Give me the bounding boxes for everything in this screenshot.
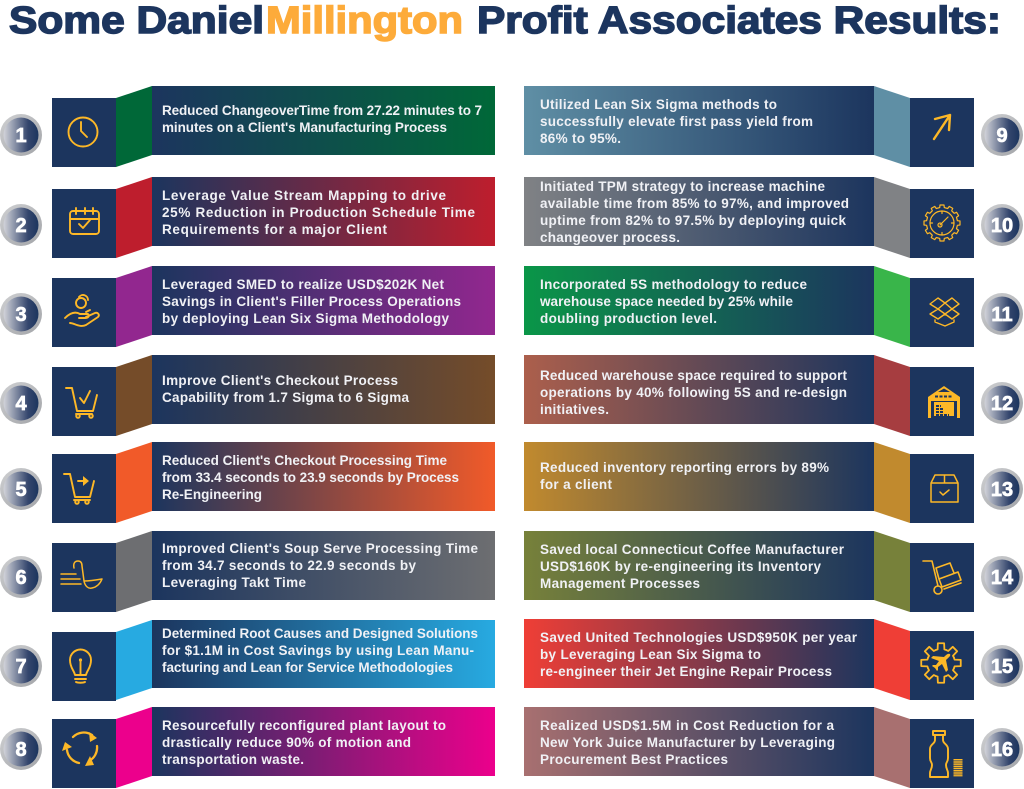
panel: result 13 bbox=[524, 442, 1023, 523]
text 1: Reduced ChangeoverTime from 27.22 minutes to 7 bbox=[162, 103, 482, 118]
text 11: doubling production level. bbox=[540, 311, 717, 326]
icon: calendar bbox=[70, 208, 99, 234]
text 2 bbox=[162, 188, 475, 237]
fold 9 bbox=[874, 86, 910, 167]
number badge 10: 10 bbox=[991, 215, 1013, 237]
icon: warehouse bbox=[928, 386, 960, 418]
icon box 13 bbox=[910, 454, 974, 523]
text 7: facturing and Lean for Service Methodologies bbox=[162, 660, 453, 675]
text 14 bbox=[540, 542, 845, 591]
number badge 6: 6 bbox=[15, 567, 27, 589]
number badge 5 bbox=[0, 468, 42, 510]
icon: gear gauge bbox=[924, 205, 960, 241]
icon: upward arrow bbox=[934, 115, 950, 139]
panel: result 4 bbox=[0, 355, 495, 436]
icon box 10 bbox=[910, 189, 974, 258]
icon box 5 bbox=[52, 454, 116, 523]
title: Some Daniel bbox=[9, 0, 264, 42]
text 11: warehouse space needed by 25% while bbox=[539, 294, 793, 309]
icon: clock bbox=[68, 118, 98, 146]
text 11: Incorporated 5S methodology to reduce bbox=[540, 277, 807, 292]
number badge 16 bbox=[981, 728, 1023, 770]
panel: result 9 bbox=[524, 86, 1023, 167]
text 13: Reduced inventory reporting errors by 89% bbox=[540, 460, 829, 475]
icon box 14 bbox=[910, 543, 974, 612]
icon: gear with airplane bbox=[921, 643, 961, 683]
number badge 6 bbox=[0, 556, 42, 598]
text panel 11 bbox=[524, 266, 874, 335]
icon box 8 bbox=[52, 719, 116, 788]
icon box 12 bbox=[910, 367, 974, 436]
icon: box with check bbox=[931, 475, 958, 502]
text 16: Procurement Best Practices bbox=[540, 752, 728, 767]
number badge 16: 16 bbox=[991, 739, 1013, 761]
text panel 8 bbox=[152, 707, 495, 776]
icon box 11 bbox=[910, 278, 974, 347]
fold 1 bbox=[116, 86, 152, 167]
text 10: changeover process. bbox=[540, 230, 680, 245]
fold 16 bbox=[874, 707, 910, 788]
panel: result 14 bbox=[524, 531, 1023, 612]
number badge 11: 11 bbox=[991, 304, 1013, 326]
fold 7 bbox=[116, 620, 152, 700]
panel: result 5 bbox=[0, 442, 495, 523]
number badge 1: 1 bbox=[15, 125, 27, 147]
panel: result 15 bbox=[524, 619, 1023, 700]
text 7: Determined Root Causes and Designed Solutions bbox=[162, 626, 478, 641]
text 10: uptime from 82% to 97.5% by deploying quick bbox=[540, 213, 846, 228]
text 7: for $1.1M in Cost Savings by using Lean Manu- bbox=[162, 643, 474, 658]
text 9: successfully elevate first pass yield from bbox=[540, 114, 813, 129]
text 14: Saved local Connecticut Coffee Manufacturer bbox=[540, 542, 845, 557]
text panel 14 bbox=[524, 531, 874, 600]
number badge 12: 12 bbox=[991, 393, 1013, 415]
number badge 4: 4 bbox=[15, 393, 27, 415]
text 8: Resourcefully reconfigured plant layout to bbox=[162, 718, 446, 733]
number badge 14 bbox=[981, 556, 1023, 598]
text 3: Leveraged SMED to realize USD$202K Net bbox=[162, 277, 444, 292]
icon: juice bottle and coins bbox=[930, 731, 958, 777]
title bbox=[9, 0, 1001, 42]
text panel 4 bbox=[152, 355, 495, 424]
text 5 bbox=[162, 453, 459, 502]
panel: result 10 bbox=[524, 177, 1023, 258]
title: Profit Associates Results: bbox=[477, 0, 1001, 42]
icon box 2 bbox=[52, 189, 116, 258]
text 8 bbox=[162, 718, 446, 767]
fold 2 bbox=[116, 177, 152, 258]
text panel 12 bbox=[524, 355, 874, 424]
text 10: available time from 85% to 97%, and improved bbox=[540, 196, 849, 211]
text 16: Realized USD$1.5M in Cost Reduction for a bbox=[540, 718, 834, 733]
icon: recycle arrows bbox=[62, 732, 97, 766]
text panel 10 bbox=[524, 177, 874, 246]
text 5: Re-Engineering bbox=[162, 487, 262, 502]
icon box 1 bbox=[52, 98, 116, 167]
fold 14 bbox=[874, 531, 910, 612]
text 2: Requirements for a major Client bbox=[162, 222, 388, 237]
fold 6 bbox=[116, 531, 152, 612]
text panel 3 bbox=[152, 266, 495, 335]
text panel 9 bbox=[524, 86, 874, 155]
icon box 6 bbox=[52, 543, 116, 612]
text 16 bbox=[540, 718, 835, 767]
text panel 5 bbox=[152, 442, 495, 511]
icon: light bulb bbox=[70, 650, 91, 683]
fold 12 bbox=[874, 355, 910, 436]
text 15: by Leveraging Lean Six Sigma to bbox=[540, 647, 761, 662]
fold 4 bbox=[116, 355, 152, 436]
number badge 3: 3 bbox=[15, 304, 27, 326]
text 9: Utilized Lean Six Sigma methods to bbox=[540, 97, 777, 112]
text 15: re-engineer their Jet Engine Repair Process bbox=[540, 664, 832, 679]
text 6 bbox=[162, 541, 478, 590]
fold 13 bbox=[874, 442, 910, 523]
panel: result 16 bbox=[524, 707, 1023, 788]
text 9 bbox=[540, 97, 813, 146]
text 13: for a client bbox=[540, 477, 612, 492]
number badge 11 bbox=[981, 293, 1023, 335]
text 7 bbox=[162, 626, 478, 675]
text 14: Management Processes bbox=[540, 576, 700, 591]
icon box 16 bbox=[910, 719, 974, 788]
text 9: 86% to 95%. bbox=[540, 131, 621, 146]
text 11 bbox=[539, 277, 807, 326]
fold 3 bbox=[116, 266, 152, 347]
text 5: from 33.4 seconds to 23.9 seconds by Process bbox=[162, 470, 459, 485]
panel: result 1 bbox=[0, 86, 495, 167]
text 4: Improve Client's Checkout Process bbox=[162, 373, 398, 388]
text 6: Leveraging Takt Time bbox=[162, 575, 306, 590]
text panel 15 bbox=[524, 619, 874, 688]
text 6: Improved Client's Soup Serve Processing Time bbox=[162, 541, 478, 556]
panel: result 12 bbox=[524, 355, 1023, 436]
text 6: from 34.7 seconds to 22.9 seconds by bbox=[162, 558, 416, 573]
text 2: 25% Reduction in Production Schedule Time bbox=[162, 205, 475, 220]
icon box 3 bbox=[52, 278, 116, 347]
fold 8 bbox=[116, 707, 152, 788]
title: Millington bbox=[266, 0, 463, 42]
number badge 2: 2 bbox=[15, 215, 27, 237]
icon: cart with arrow bbox=[64, 474, 94, 504]
text 15 bbox=[540, 630, 858, 679]
text 13 bbox=[540, 460, 829, 492]
panel: result 2 bbox=[0, 177, 495, 258]
panel: result 11 bbox=[524, 266, 1023, 347]
text 15: Saved United Technologies USD$950K per year bbox=[540, 630, 858, 645]
number badge 8: 8 bbox=[15, 739, 27, 761]
text 4 bbox=[162, 373, 409, 405]
number badge 9: 9 bbox=[996, 125, 1008, 147]
icon: cart with check bbox=[66, 388, 97, 418]
text 3: by deploying Lean Six Sigma Methodology bbox=[162, 311, 449, 326]
number badge 1 bbox=[0, 114, 42, 156]
text 10 bbox=[540, 179, 849, 245]
text 1: minutes on a Client's Manufacturing Process bbox=[162, 120, 447, 135]
panel: result 8 bbox=[0, 707, 495, 788]
text panel 6 bbox=[152, 531, 495, 600]
text 16: New York Juice Manufacturer by Leveraging bbox=[540, 735, 835, 750]
text 14: USD$160K by re-engineering its Inventory bbox=[540, 559, 821, 574]
icon box 7 bbox=[52, 632, 116, 701]
icon box 15 bbox=[910, 631, 974, 700]
number badge 3 bbox=[0, 293, 42, 335]
text 12: Reduced warehouse space required to support bbox=[540, 368, 848, 383]
text 5: Reduced Client's Checkout Processing Time bbox=[162, 453, 447, 468]
text panel 2 bbox=[152, 177, 495, 246]
number badge 13: 13 bbox=[991, 479, 1013, 501]
number badge 15: 15 bbox=[991, 656, 1013, 678]
icon box 4 bbox=[52, 367, 116, 436]
number badge 5: 5 bbox=[15, 479, 27, 501]
text 1 bbox=[162, 103, 482, 135]
text panel 13 bbox=[524, 442, 874, 511]
number badge 13 bbox=[981, 468, 1023, 510]
fold 15 bbox=[874, 619, 910, 700]
text 10: Initiated TPM strategy to increase machine bbox=[540, 179, 825, 194]
icon: stacked boxes bbox=[930, 298, 959, 326]
number badge 7: 7 bbox=[15, 656, 27, 678]
number badge 12 bbox=[981, 382, 1023, 424]
number badge 7 bbox=[0, 645, 42, 687]
text 12 bbox=[540, 368, 848, 417]
icon: hand truck bbox=[923, 561, 961, 594]
text panel 7 bbox=[152, 620, 495, 688]
fold 11 bbox=[874, 266, 910, 347]
panel: result 7 bbox=[0, 620, 495, 701]
panel: result 6 bbox=[0, 531, 495, 612]
text 12: operations by 40% following 5S and re-design bbox=[540, 385, 847, 400]
icon: hand with coins bbox=[65, 295, 99, 326]
text 3 bbox=[162, 277, 461, 326]
panel: result 3 bbox=[0, 266, 495, 347]
text panel 16 bbox=[524, 707, 874, 776]
text 3: Savings in Client's Filler Process Operations bbox=[162, 294, 461, 309]
fold 5 bbox=[116, 442, 152, 523]
number badge 10 bbox=[981, 204, 1023, 246]
text 8: drastically reduce 90% of motion and bbox=[162, 735, 411, 750]
number badge 15 bbox=[981, 645, 1023, 687]
text 12: initiatives. bbox=[540, 402, 609, 417]
number badge 4 bbox=[0, 382, 42, 424]
text panel 1 bbox=[152, 86, 495, 155]
fold 10 bbox=[874, 177, 910, 258]
number badge 14: 14 bbox=[991, 567, 1014, 589]
icon box 9 bbox=[910, 98, 974, 167]
number badge 9 bbox=[981, 114, 1023, 156]
text 8: transportation waste. bbox=[162, 752, 304, 767]
number badge 2 bbox=[0, 204, 42, 246]
text 2: Leverage Value Stream Mapping to drive bbox=[162, 188, 446, 203]
text 4: Capability from 1.7 Sigma to 6 Sigma bbox=[162, 390, 409, 405]
icon: ladle bbox=[61, 561, 102, 588]
number badge 8 bbox=[0, 728, 42, 770]
